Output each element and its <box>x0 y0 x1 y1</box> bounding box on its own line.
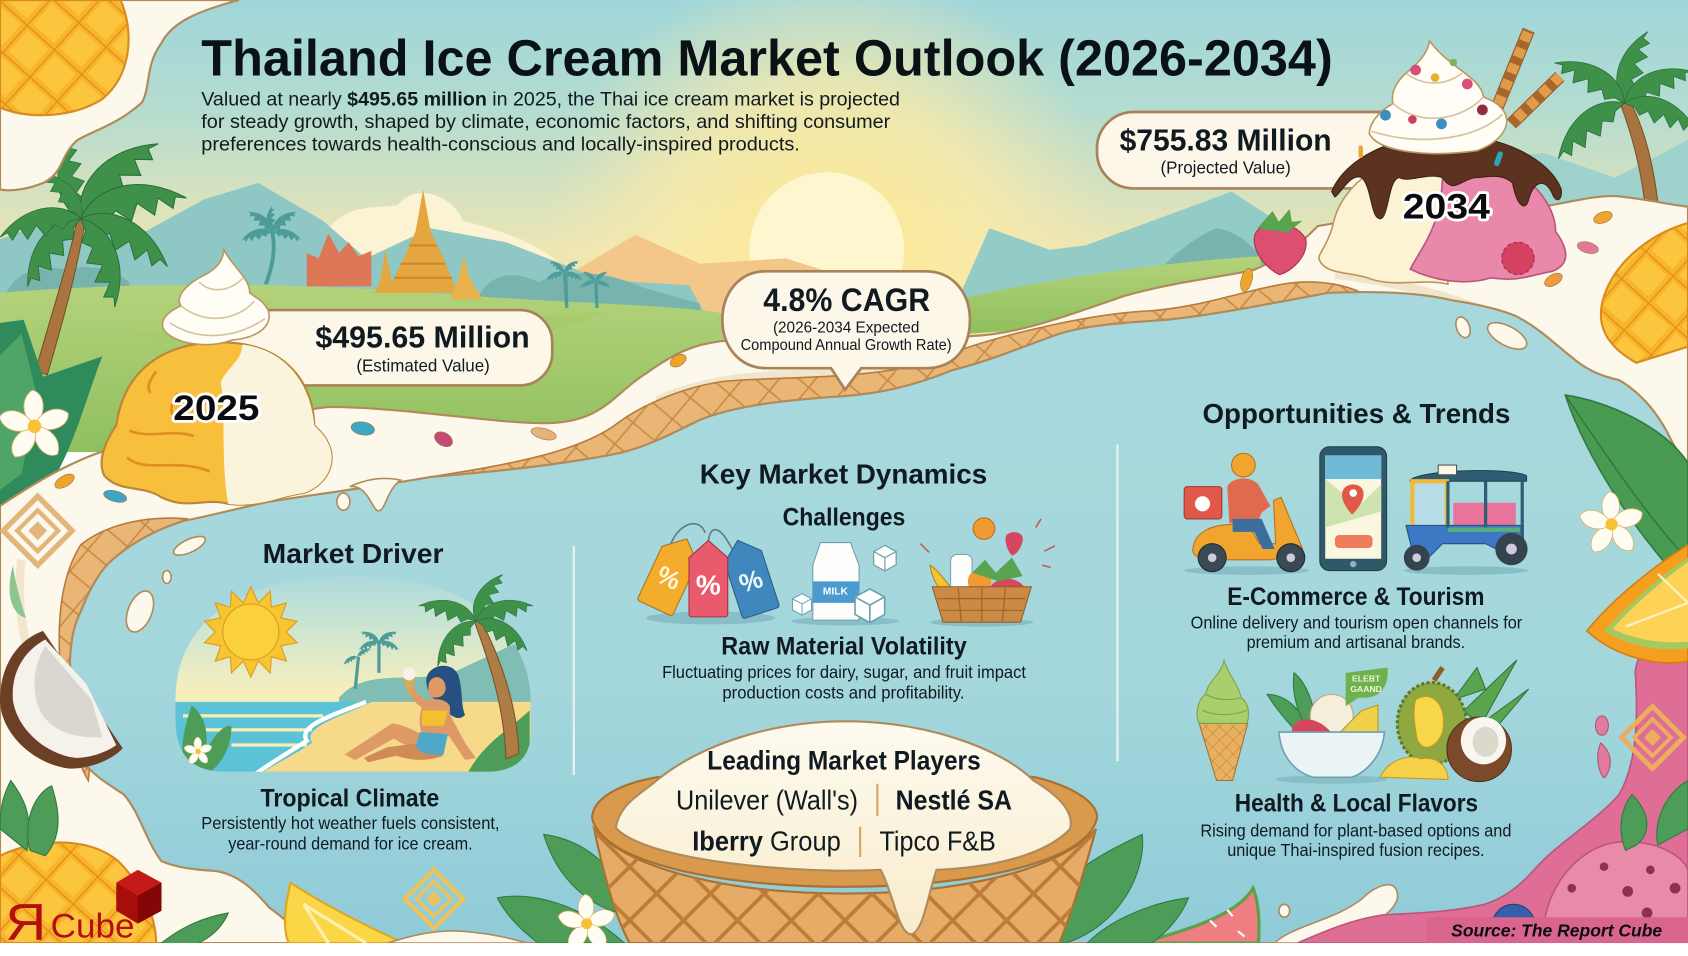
description <box>1191 613 1522 652</box>
heading: Leading Market Players <box>707 746 981 776</box>
cream drips and droplets <box>121 315 1531 943</box>
description: year-round demand for ice cream. <box>228 833 473 853</box>
icon: price tags: % <box>736 565 766 599</box>
lake background <box>70 292 1688 943</box>
intro paragraph: Valued at nearly $495.65 million in 2025, the Thai ice cream market is projected <box>201 89 900 111</box>
subheading: health and local flavors: Health & Local Flavors <box>1235 790 1478 818</box>
subheading: raw material volatility: Raw Material Volatility <box>721 633 967 661</box>
icon: tuk-tuk <box>1404 465 1529 575</box>
icon: fusion bowl <box>1267 667 1388 784</box>
icon: lemon slice bottom <box>285 883 404 943</box>
left dark foliage <box>0 320 102 506</box>
icon: pink scoop bottom right <box>1543 842 1688 943</box>
callout: 2025 value: $495.65 Million <box>315 322 530 355</box>
icon: milk and sugar <box>791 543 899 625</box>
near leg <box>364 743 444 762</box>
subheading: challenges: Challenges <box>783 504 905 531</box>
illustration: beach scene <box>172 569 538 775</box>
distant tree line <box>0 228 1270 323</box>
far leg <box>344 723 426 760</box>
description: premium and artisanal brands. <box>1247 632 1465 652</box>
river sprinkles <box>53 209 1614 505</box>
right palm tree <box>1546 27 1688 205</box>
callout: CAGR bubble <box>722 271 970 390</box>
icon: mango bottom-left <box>0 842 156 943</box>
clouds <box>323 193 571 275</box>
icon: strawberry <box>1254 209 1306 275</box>
callout: 2025 value <box>226 310 552 385</box>
heading: Key Market Dynamics <box>700 458 987 489</box>
panel: leading market players cup <box>497 721 1188 956</box>
icon: delivery scooter <box>1184 453 1309 575</box>
panel: key market dynamics <box>637 458 1055 703</box>
wafer cup <box>594 829 1096 943</box>
source strip <box>1426 917 1688 943</box>
small flower <box>183 737 213 766</box>
logo: RCube: Я <box>5 893 46 951</box>
sun <box>205 587 297 677</box>
orange mountain <box>560 235 861 312</box>
description: Persistently hot weather fuels consistent, <box>201 813 500 833</box>
description <box>1200 820 1511 860</box>
waffle edge along river <box>431 282 1362 477</box>
icon: mango top-left <box>0 0 129 115</box>
intro paragraph: preferences towards health-conscious and locally-inspired products. <box>201 134 800 156</box>
divider <box>574 445 1117 775</box>
description: production costs and profitability. <box>722 683 965 703</box>
green accent <box>10 565 26 618</box>
icon: ornament left <box>3 496 72 565</box>
palm <box>417 569 535 759</box>
wafer sticks <box>1495 30 1560 124</box>
callout: 2025 value: (Estimated Value) <box>356 355 490 375</box>
description: Fluctuating prices for dairy, sugar, and fruit impact <box>662 662 1026 682</box>
panel: opportunities and trends <box>1184 398 1529 860</box>
heading: Market Driver <box>263 538 444 569</box>
bottom white band <box>0 943 1688 956</box>
arms <box>407 685 430 708</box>
source strip: Source: The Report Cube <box>1451 921 1662 941</box>
cup rim <box>592 769 1097 887</box>
hair <box>426 666 465 718</box>
temple <box>307 189 482 299</box>
icon: mango right <box>1601 223 1688 363</box>
icon: durian <box>1380 660 1529 779</box>
callout: CAGR bubble: 4.8% CAGR <box>763 282 930 318</box>
leaves by pink scoop <box>1621 781 1688 850</box>
whipped cream top <box>1369 41 1507 154</box>
wafer lattice <box>594 830 1096 943</box>
bottom cream splash <box>388 931 528 943</box>
icon: fruit basket <box>920 518 1055 627</box>
top-left cream splash <box>0 0 239 190</box>
cone <box>403 678 416 698</box>
scoop 2025 <box>102 250 332 505</box>
icon: blueberry <box>1492 904 1535 947</box>
player: Unilever: Unilever (Wall's) <box>676 785 858 816</box>
subheading: Tropical Climate <box>261 784 439 812</box>
field <box>0 285 732 452</box>
bottom-left accent leaves <box>0 781 228 947</box>
callout: 2034 value: (Projected Value) <box>1160 157 1291 177</box>
description: unique Thai-inspired fusion recipes. <box>1227 840 1485 860</box>
whipped cream <box>162 250 269 345</box>
description <box>662 662 1026 703</box>
intro paragraph <box>201 89 900 156</box>
sky background <box>0 0 1688 366</box>
callout: CAGR bubble: (2026-2034 Expected <box>773 319 919 337</box>
subheading: e-commerce and tourism: E-Commerce & Tourism <box>1227 583 1485 611</box>
icon: coconut left <box>0 631 123 769</box>
separators <box>860 784 877 857</box>
sun glow <box>0 0 1688 366</box>
scoop body <box>102 342 332 505</box>
green label: ELEBT <box>1352 673 1381 683</box>
drops of pink <box>1595 716 1610 778</box>
right foliage <box>1565 395 1688 587</box>
logo: RCube <box>5 870 161 951</box>
woman with ice cream <box>344 666 476 762</box>
icon: ornament bottom <box>405 870 463 928</box>
panel: market driver <box>172 538 538 853</box>
waffle crescent on left <box>59 518 188 781</box>
icon: flower right <box>1577 492 1645 556</box>
pink half <box>1410 151 1566 282</box>
green label <box>1346 667 1388 706</box>
icon: milk and sugar: MILK <box>823 586 848 597</box>
icon: price tags: % <box>696 569 721 600</box>
bikini top <box>422 711 449 726</box>
description: Rising demand for plant-based options and <box>1200 820 1511 840</box>
sprinkles <box>1359 59 1504 167</box>
scoop 2034 <box>1319 30 1566 284</box>
left palm tree <box>0 127 189 375</box>
vanilla half <box>1319 151 1448 284</box>
background palms <box>239 206 612 308</box>
pink ice cream stream <box>1297 619 1688 943</box>
heading: Opportunities & Trends <box>1202 398 1510 429</box>
year label: 2025 <box>173 388 259 428</box>
callout: CAGR bubble: Compound Annual Growth Rate) <box>741 336 952 354</box>
left mountain <box>0 183 711 323</box>
icon: flower on cup <box>556 894 617 952</box>
green label: GAAND <box>1350 684 1382 694</box>
landscape: mountains, temple and field <box>0 140 1688 452</box>
cream river <box>0 196 1688 943</box>
year label: 2034 <box>1403 187 1490 227</box>
icon: price tags <box>637 524 780 624</box>
right mountains <box>947 192 1335 323</box>
chocolate topping <box>1332 135 1561 219</box>
ice cream dome <box>616 721 1071 934</box>
player: Iberry: Iberry Group <box>692 825 841 856</box>
sun disc <box>749 172 904 327</box>
cream shading <box>20 275 1550 689</box>
raspberry <box>1502 242 1534 275</box>
logo: RCube: Cube <box>51 908 135 946</box>
intro paragraph: for steady growth, shaped by climate, economic factors, and shifting consumer <box>201 111 891 133</box>
title: Thailand Ice Cream Market Outlook (2026-2034) <box>201 29 1333 86</box>
icon: smartphone with map <box>1320 447 1387 571</box>
icon: price tags: % <box>652 561 685 596</box>
bottom leaves <box>497 834 1188 943</box>
player: Nestle: Nestlé SA <box>896 785 1012 816</box>
icon: coconut <box>1447 717 1511 782</box>
shorts <box>416 732 448 755</box>
description: Online delivery and tourism open channels for <box>1191 613 1522 633</box>
icon: orange slice right <box>1587 545 1688 663</box>
callout: 2034 value <box>1097 112 1420 188</box>
icon: flower left <box>0 390 72 462</box>
callout: 2034 value: $755.83 Million <box>1120 125 1332 158</box>
description <box>201 813 500 853</box>
icon: watermelon slice <box>1140 888 1259 943</box>
head and torso <box>420 677 450 736</box>
icon: ornament on pink <box>1621 706 1683 768</box>
player: Tipco: Tipco F&B <box>880 825 996 856</box>
icon: matcha soft serve cone <box>1197 660 1248 781</box>
